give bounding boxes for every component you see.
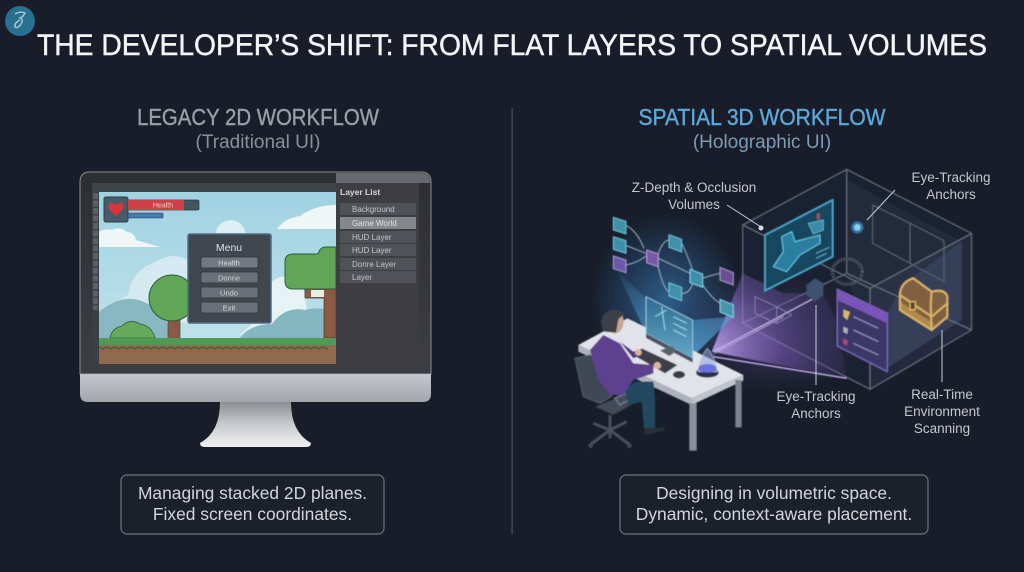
game menu: Health [218, 258, 240, 268]
monitor stand [200, 402, 311, 447]
callout: spatial [620, 475, 928, 534]
layer list panel: HUD Layer [352, 233, 392, 242]
chair [575, 355, 640, 448]
layer list panel: Donre Layer [352, 260, 396, 269]
leader lines [727, 190, 942, 385]
label: environment scanning: Scanning [914, 421, 970, 436]
title: THE DEVELOPER’S SHIFT: FROM FLAT LAYERS TO SPATIAL VOLUMES [37, 29, 987, 62]
callout: legacy: Managing stacked 2D planes. [138, 483, 367, 503]
heading: legacy 2D workflow [137, 104, 379, 153]
holographic monitor [646, 297, 693, 363]
inventory panel [837, 289, 887, 372]
monitor illustration [80, 172, 431, 447]
heading: legacy 2D workflow: LEGACY 2D WORKFLOW [137, 104, 379, 130]
label: environment scanning: Environment [904, 404, 980, 419]
spatial workstation illustration [575, 169, 972, 451]
heading: legacy 2D workflow: (Traditional UI) [196, 132, 320, 153]
projector dome [696, 348, 719, 378]
icon: logo badge [5, 6, 35, 36]
layer list panel: Game World [352, 219, 397, 228]
wireframe windows [873, 205, 944, 282]
anchor point [758, 226, 764, 230]
callout: legacy [121, 475, 384, 534]
HUD health bar [128, 200, 199, 210]
tree left [168, 318, 180, 339]
callout: spatial: Designing in volumetric space. [656, 483, 892, 503]
game menu: Menu [216, 242, 242, 254]
holographic volume box [743, 169, 972, 389]
distant hills [99, 299, 180, 338]
label: eye-tracking top: Eye-Tracking [911, 170, 991, 185]
layer list panel [336, 183, 419, 364]
divider [512, 108, 513, 534]
layer list panel: Layer [352, 273, 372, 282]
label: z-depth: Z-Depth & Occlusion [632, 180, 756, 195]
hologram glow [590, 213, 743, 387]
clouds [99, 228, 160, 247]
layer list panel: Layer List [340, 187, 380, 197]
label: eye-tracking top: Anchors [926, 187, 976, 202]
person [590, 310, 665, 435]
ground [99, 338, 336, 347]
heading: spatial 3D workflow: (Holographic UI) [693, 132, 831, 153]
label: z-depth: Volumes [668, 197, 720, 212]
HUD health bar: Health [153, 202, 173, 210]
anchor: lower [807, 278, 823, 302]
desk [578, 318, 743, 451]
tree right [305, 289, 336, 338]
wireframe cube [755, 297, 792, 323]
game menu: Exit [223, 304, 236, 312]
scan mesh [832, 259, 862, 284]
holographic blueprint panel [765, 200, 833, 291]
tool strip [92, 192, 99, 364]
layer list panel: Background [352, 205, 395, 214]
layer list panel: HUD Layer [352, 246, 392, 255]
game scene [99, 192, 336, 364]
projector beams [712, 273, 847, 378]
label: environment scanning: Real-Time [911, 387, 973, 402]
game menu: Donne [218, 274, 240, 282]
window chrome [92, 183, 337, 192]
purple ambient glow [683, 273, 870, 393]
callout: legacy: Fixed screen coordinates. [153, 504, 352, 524]
treasure chest [900, 278, 947, 330]
keyboard and mouse [633, 348, 685, 378]
heading: spatial 3D workflow: SPATIAL 3D WORKFLOW [638, 104, 886, 130]
node graph [613, 217, 733, 317]
anchor: upper [851, 221, 863, 233]
game menu [188, 234, 271, 323]
bezel highlight [336, 173, 430, 183]
label: eye-tracking bottom: Anchors [791, 406, 841, 421]
HUD heart [104, 197, 128, 222]
monitor chin [80, 374, 431, 402]
bush [110, 321, 155, 338]
projection cone [617, 270, 733, 357]
monitor body [80, 172, 431, 374]
heading: spatial 3D workflow [638, 104, 886, 153]
callout: spatial: Dynamic, context-aware placement. [636, 504, 912, 524]
HUD mana bar [128, 213, 163, 218]
label: eye-tracking bottom: Eye-Tracking [776, 389, 856, 404]
game menu: Undo [220, 288, 238, 298]
